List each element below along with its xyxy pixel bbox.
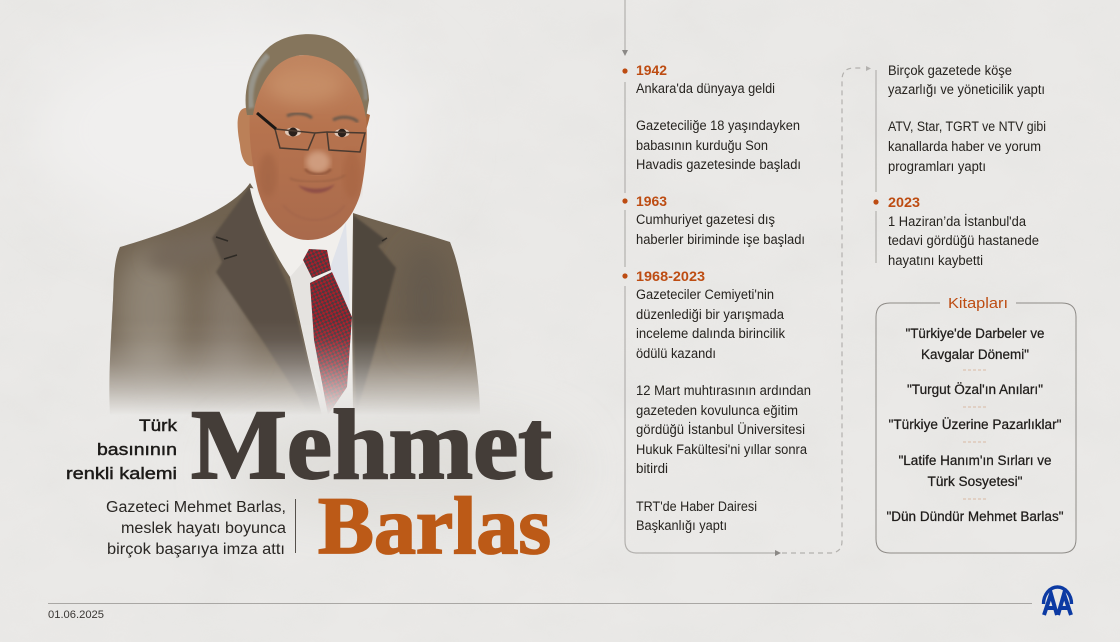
timeline lines and arrows — [622, 0, 876, 556]
mouth — [298, 184, 335, 193]
entry 1968-2023: gördüğü İstanbul Üniversitesi — [636, 422, 805, 437]
entry 1942: babasının kurduğu Son — [636, 138, 768, 153]
book list: "Turgut Özal'ın Anıları" — [907, 382, 1043, 397]
head — [238, 34, 370, 240]
entry 1968-2023: düzenlediği bir yarışmada — [636, 307, 784, 322]
eyebrows — [287, 114, 358, 122]
entry continued: ATV, Star, TGRT ve NTV gibi — [888, 119, 1046, 134]
entry 1942: Ankara'da dünyaya geldi — [636, 81, 775, 96]
text: subtitle Türk basınının renkli kalemi: basınının — [97, 440, 177, 459]
icon: AA logo — [1044, 587, 1072, 615]
entry 1968-2023: inceleme dalında birincilik — [636, 326, 785, 341]
footer: date: 01.06.2025 — [48, 609, 104, 621]
timeline dots — [622, 68, 879, 279]
book list: "Türkiye Üzerine Pazarlıklar" — [888, 417, 1062, 432]
entry 1968-2023: ödülü kazandı — [636, 346, 716, 361]
hair — [246, 34, 369, 118]
necktie — [303, 249, 352, 415]
face — [249, 55, 367, 240]
entry continued: Birçok gazetede köşe — [888, 63, 1012, 78]
panel: Kitapları — [876, 295, 1076, 553]
entry 1968-2023: TRT'de Haber Dairesi — [636, 499, 757, 514]
entry 2023: 1 Haziran’da İstanbul'da — [888, 214, 1026, 229]
entry 1968-2023: gazeteden kovulunca eğitim — [636, 403, 798, 418]
book list: Kavgalar Dönemi" — [921, 347, 1029, 362]
entry 2023: hayatını kaybetti — [888, 253, 983, 268]
book list: Türk Sosyetesi" — [928, 474, 1023, 489]
portrait photo of Mehmet Barlas — [100, 34, 490, 420]
book list: "Türkiye'de Darbeler ve — [906, 326, 1044, 341]
entry 1968-2023: 1968-2023 — [636, 268, 705, 284]
heading: Kitapları: Kitapları — [948, 295, 1008, 312]
book list — [886, 326, 1064, 524]
entry 1942: Gazeteciliğe 18 yaşındayken — [636, 118, 800, 133]
text: description — [106, 499, 286, 558]
text: description: birçok başarıya imza attı — [107, 541, 285, 558]
timeline column 2 — [888, 63, 1046, 268]
entry continued: kanallarda haber ve yorum — [888, 139, 1041, 154]
entry 1968-2023: bitirdi — [636, 461, 668, 476]
entry 1942 — [636, 62, 801, 172]
jacket — [100, 180, 490, 420]
text: subtitle Türk basınının renkli kalemi — [66, 416, 178, 483]
title: Barlas: Barlas — [318, 480, 551, 571]
shirt — [250, 188, 353, 415]
entry 1968-2023: Gazeteciler Cemiyeti'nin — [636, 287, 774, 302]
nose — [306, 151, 330, 173]
title: Mehmet: Mehmet — [191, 389, 552, 500]
glasses — [275, 129, 365, 152]
entry continued — [888, 63, 1046, 174]
ear — [238, 108, 254, 166]
entry 1963 — [636, 193, 805, 247]
entry 1963: 1963 — [636, 193, 667, 209]
entry continued: programları yaptı — [888, 159, 986, 174]
entry 1968-2023: Hukuk Fakültesi'ni yıllar sonra — [636, 442, 807, 457]
entry 1942: 1942 — [636, 62, 667, 78]
book list: "Latife Hanım'ın Sırları ve — [898, 453, 1052, 468]
timeline column 1 — [636, 62, 811, 533]
text: subtitle Türk basınının renkli kalemi: Türk — [139, 416, 178, 435]
entry 1963: haberler biriminde işe başladı — [636, 232, 805, 247]
text: description: Gazeteci Mehmet Barlas, — [106, 499, 286, 516]
footer: rule — [48, 603, 1032, 604]
eyes — [285, 128, 301, 136]
book list: "Dün Dündür Mehmet Barlas" — [886, 509, 1064, 524]
text: subtitle Türk basınının renkli kalemi: renkli kalemi — [66, 464, 177, 483]
entry 1968-2023: 12 Mart muhtırasının ardından — [636, 383, 811, 398]
entry 2023: 2023 — [888, 194, 920, 210]
entry 1942: Havadis gazetesinde başladı — [636, 157, 801, 172]
entry 1963: Cumhuriyet gazetesi dış — [636, 212, 775, 227]
entry 2023 — [888, 194, 1039, 268]
text: description: meslek hayatı boyunca — [121, 520, 286, 537]
entry 2023: tedavi gördüğü hastanede — [888, 233, 1039, 248]
entry 1968-2023 — [636, 268, 811, 533]
entry continued: yazarlığı ve yöneticilik yaptı — [888, 82, 1045, 97]
entry 1968-2023: Başkanlığı yaptı — [636, 518, 727, 533]
